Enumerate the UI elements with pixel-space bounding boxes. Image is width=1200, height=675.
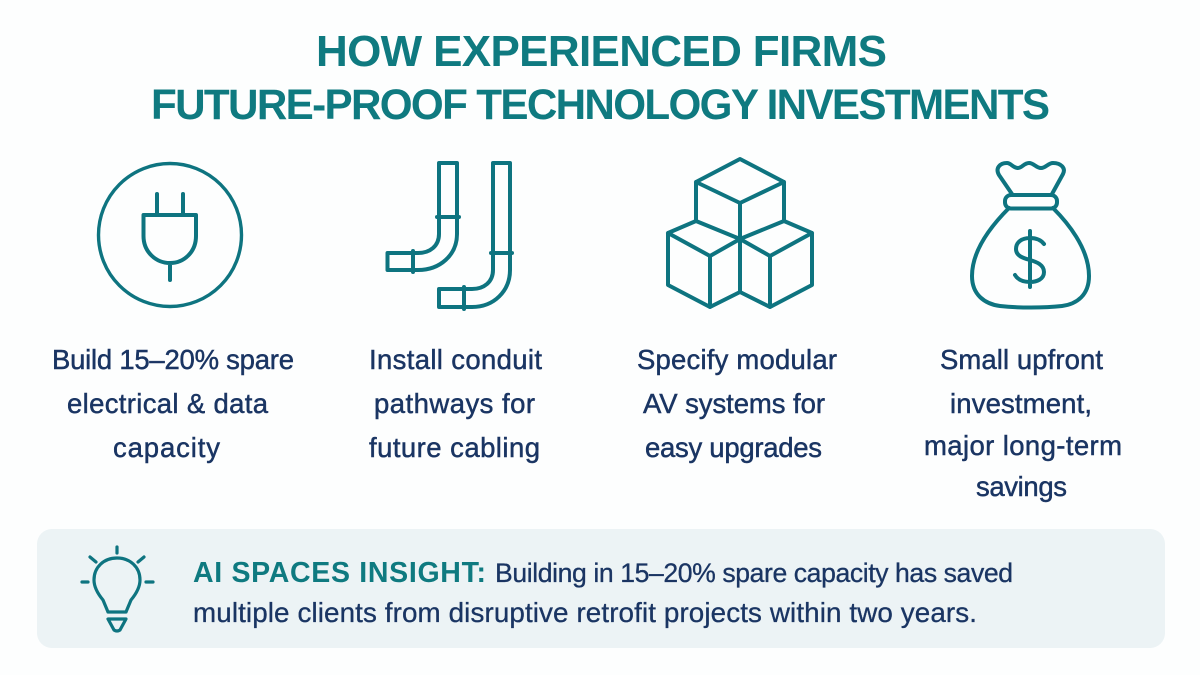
text: modular AV: AV systems for (643, 388, 825, 419)
title: HOW EXPERIENCED FIRMS (316, 27, 887, 76)
text: savings (924, 344, 1122, 502)
icon: light bulb (82, 547, 153, 631)
title: FUTURE-PROOF TECHNOLOGY INVESTMENTS (151, 81, 1050, 128)
insight text (193, 557, 1013, 628)
text: conduit pathways: pathways for (374, 388, 535, 419)
text: spare capacity: Build 15–20% spare (52, 344, 294, 375)
text: conduit pathways: Install conduit (369, 344, 542, 375)
insight text: multiple clients from disruptive retrofit projects within two years. (193, 597, 977, 628)
text: spare capacity (52, 344, 294, 463)
text: savings: major long-term (924, 430, 1122, 461)
text: modular AV: Specify modular (637, 344, 837, 375)
text: conduit pathways (369, 344, 542, 463)
title (151, 27, 1050, 128)
text: savings: savings (976, 471, 1067, 502)
text: savings: Small upfront (940, 344, 1103, 375)
icon: stacked cubes (668, 159, 812, 307)
text: spare capacity: electrical & data (67, 388, 269, 419)
text: modular AV (637, 344, 837, 463)
text: modular AV: easy upgrades (645, 432, 822, 463)
panel: AI Spaces insight (37, 529, 1165, 648)
icon: conduit pipes (388, 163, 512, 309)
column 3: modular AV (637, 159, 837, 463)
icon: money bag (972, 163, 1089, 308)
column 2: conduit pathways (369, 163, 542, 463)
text: savings: investment, (950, 388, 1092, 419)
insight text: Building in 15–20% spare capacity has saved (495, 558, 1013, 588)
text: conduit pathways: future cabling (369, 432, 540, 463)
text: spare capacity: capacity (113, 432, 220, 463)
insight text: AI SPACES INSIGHT: (193, 557, 486, 589)
column 4: savings (924, 163, 1122, 502)
column 1: spare capacity (52, 164, 294, 463)
icon: plug in circle (98, 164, 242, 306)
